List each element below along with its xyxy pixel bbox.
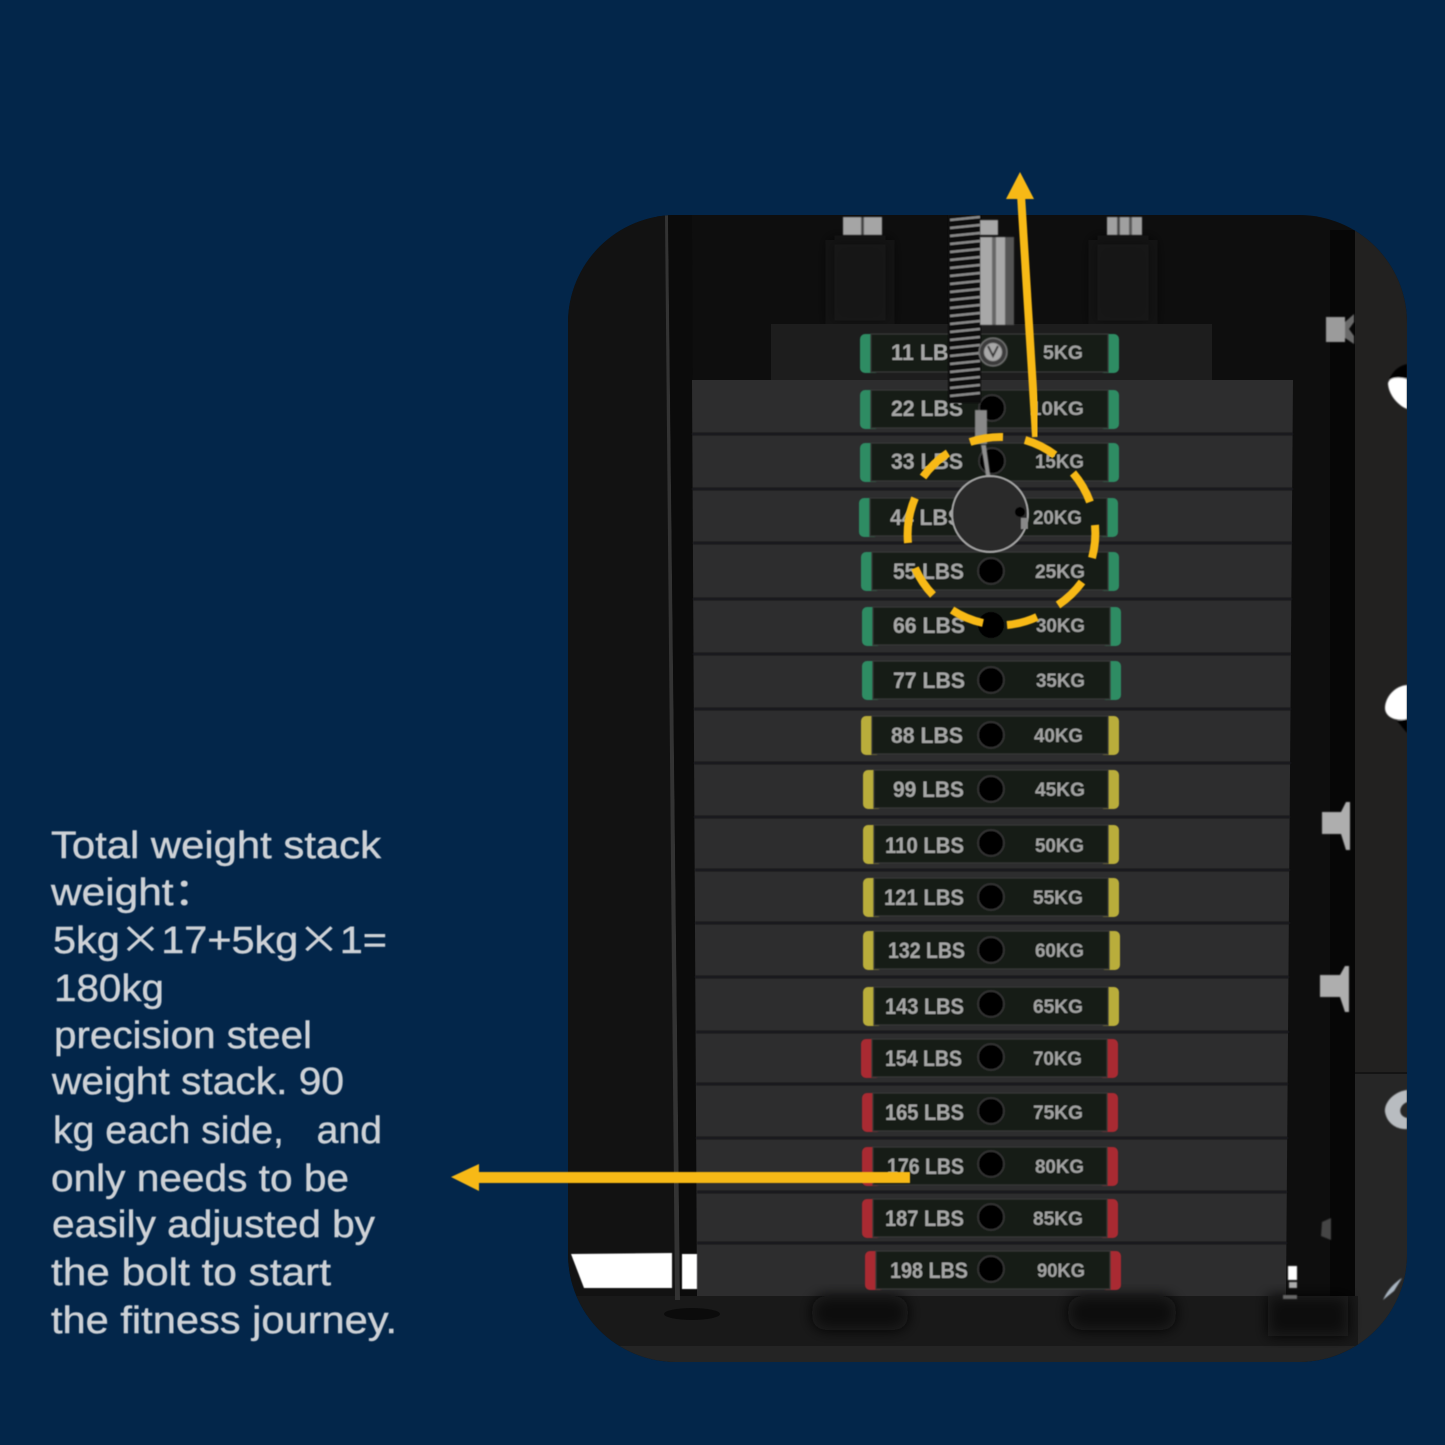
label row: 176 LBS / 80KG: 80KG [1035, 1157, 1084, 1178]
text block: weight description: 180kg [54, 968, 164, 1010]
label row: 22 LBS / 10KG [860, 390, 1119, 429]
text block: weight description [50, 825, 397, 1342]
label row: 154 LBS / 70KG: 70KG [1033, 1049, 1082, 1070]
label row: 132 LBS / 60KG: 60KG [1035, 941, 1084, 962]
label row: 132 LBS / 60KG [863, 931, 1120, 970]
label row: 198 LBS / 90KG [865, 1251, 1121, 1290]
label row: 110 LBS / 50KG: 110 LBS [885, 833, 964, 858]
label row: 198 LBS / 90KG: 90KG [1037, 1261, 1085, 1282]
label row: 121 LBS / 55KG: 121 LBS [884, 885, 964, 910]
right frame holes and bolts [1283, 314, 1407, 1300]
label row: 165 LBS / 75KG: 165 LBS [885, 1100, 964, 1125]
label row: 121 LBS / 55KG: 55KG [1033, 888, 1083, 909]
text block: weight description: weight stack. 90 [51, 1061, 344, 1103]
text block: weight description: 5kg×17+5kg ×1= [53, 909, 387, 964]
guide cable [664, 215, 720, 1320]
label row: 143 LBS / 65KG: 143 LBS [885, 994, 964, 1019]
arrow: up to the stack [1006, 172, 1036, 437]
label row: 88 LBS / 40KG: 88 LBS [891, 723, 963, 748]
label row: 154 LBS / 70KG [861, 1039, 1118, 1078]
label row: 110 LBS / 50KG [863, 825, 1119, 864]
label row: 143 LBS / 65KG: 65KG [1033, 997, 1083, 1018]
label row: 132 LBS / 60KG: 132 LBS [888, 938, 965, 963]
label row: 176 LBS / 80KG: 176 LBS [887, 1154, 964, 1179]
label row: 33 LBS / 15KG: 33 LBS [891, 449, 963, 474]
text block: weight description: weight： [50, 872, 216, 914]
label row: 33 LBS / 15KG [860, 443, 1119, 482]
label row: 11 LBS / 5KG: 11 LBS [891, 340, 963, 365]
text block: weight description: easily adjusted by [52, 1204, 375, 1246]
silver rod [980, 220, 1014, 325]
label row: 99 LBS / 45KG: 99 LBS [893, 777, 964, 802]
label row: 55 LBS / 25KG [861, 552, 1119, 591]
feet [812, 1296, 1348, 1336]
label row: 22 LBS / 10KG: 22 LBS [891, 396, 963, 421]
dashed highlight circle [908, 437, 1095, 625]
text block: weight description: the bolt to start [51, 1252, 331, 1294]
text block: weight description: the fitness journey. [51, 1300, 397, 1342]
cylinders [834, 244, 1148, 320]
label row: 176 LBS / 80KG [862, 1147, 1118, 1186]
label row: 22 LBS / 10KG: 10KG [1030, 399, 1084, 420]
label row: 187 LBS / 85KG: 187 LBS [885, 1206, 964, 1231]
label row: 44 LBS / 20KG: 20KG [1033, 508, 1082, 529]
label row: 44 LBS / 20KG [859, 498, 1118, 537]
text block: weight description: Total weight stack [51, 825, 382, 867]
text block: weight description: precision steel [54, 1015, 312, 1057]
label row: 55 LBS / 25KG: 25KG [1035, 562, 1085, 583]
label row: 165 LBS / 75KG [862, 1093, 1118, 1132]
panel: weight stack photo [568, 215, 1407, 1362]
label row: 77 LBS / 35KG: 35KG [1036, 671, 1085, 692]
spring [948, 215, 981, 403]
label row: 77 LBS / 35KG [862, 661, 1121, 700]
plate stack [692, 380, 1293, 1296]
arrow: left to the text [451, 1164, 910, 1191]
text block: weight description: only needs to be [51, 1158, 349, 1200]
silver caps [843, 217, 1142, 235]
label row: 33 LBS / 15KG: 15KG [1035, 452, 1084, 473]
text block: weight description: kg each side, and [53, 1110, 382, 1152]
label row: 66 LBS / 30KG: 66 LBS [893, 613, 965, 638]
label row: 154 LBS / 70KG: 154 LBS [885, 1046, 962, 1071]
top plate [771, 324, 1212, 380]
label row: 110 LBS / 50KG: 50KG [1035, 836, 1084, 857]
label row: 11 LBS / 5KG: 5KG [1043, 343, 1083, 364]
label row: 88 LBS / 40KG [861, 716, 1119, 755]
weight labels [859, 334, 1121, 1290]
label row: 77 LBS / 35KG: 77 LBS [893, 668, 965, 693]
label row: 11 LBS / 5KG [860, 334, 1119, 373]
label row: 165 LBS / 75KG: 75KG [1033, 1103, 1083, 1124]
label row: 187 LBS / 85KG [862, 1199, 1118, 1238]
label row: 99 LBS / 45KG: 45KG [1035, 780, 1085, 801]
label row: 99 LBS / 45KG [863, 770, 1119, 809]
round logo badge [979, 338, 1007, 366]
label row: 187 LBS / 85KG: 85KG [1033, 1209, 1083, 1230]
white floor block [571, 1253, 697, 1289]
label row: 55 LBS / 25KG: 55 LBS [893, 559, 964, 584]
magnified pin circle [952, 476, 1028, 552]
label row: 198 LBS / 90KG: 198 LBS [890, 1258, 968, 1283]
label row: 121 LBS / 55KG [863, 878, 1119, 917]
label row: 143 LBS / 65KG [863, 987, 1119, 1026]
pin rod [975, 410, 991, 482]
label row: 66 LBS / 30KG: 30KG [1036, 616, 1085, 637]
label row: 88 LBS / 40KG: 40KG [1034, 726, 1083, 747]
label row: 44 LBS / 20KG: 44 LBS [890, 505, 962, 530]
label row: 66 LBS / 30KG [862, 607, 1121, 646]
